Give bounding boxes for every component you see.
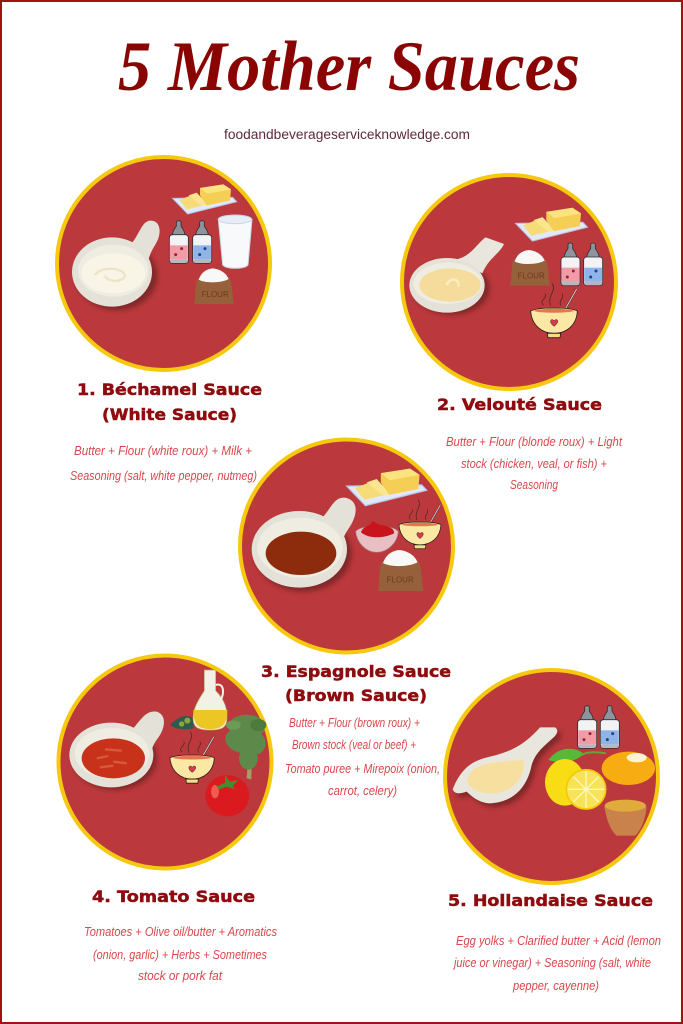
heading: béchamel sauce: 1. Béchamel Sauce [77, 380, 262, 399]
recipe text: espagnole: Tomato puree + Mirepoix (onion, [285, 761, 440, 776]
circle badge 5 [445, 670, 658, 883]
title: 5 Mother Sauces [118, 28, 580, 106]
heading: white sauce: (White Sauce) [102, 405, 237, 424]
recipe text: tomato: Tomatoes + Olive oil/butter + Aromatics [84, 924, 277, 939]
panel: béchamel sauce [57, 157, 270, 483]
website subtitle: foodandbeverageserviceknowledge.com [224, 127, 470, 142]
recipe text: hollandaise: pepper, cayenne) [512, 978, 599, 993]
panel: espagnole sauce [240, 440, 453, 798]
recipe text: velouté: stock (chicken, veal, or fish) + [461, 456, 607, 471]
panel: hollandaise sauce [445, 670, 661, 993]
recipe text: velouté: Seasoning [510, 477, 559, 492]
ingredient illustration: béchamel [72, 184, 252, 310]
circle badge 4 [58, 656, 272, 868]
recipe text: tomato: stock or pork fat [138, 968, 223, 983]
recipe text: espagnole: Brown stock (veal or beef) + [292, 737, 416, 752]
recipe text: espagnole [285, 715, 440, 798]
panel: tomato sauce [58, 656, 277, 983]
recipe text: velouté [446, 434, 623, 492]
recipe text: hollandaise: juice or vinegar) + Seasoning (salt, white [452, 955, 651, 970]
panel: velouté sauce [402, 175, 623, 492]
ingredient illustration: hollandaise [453, 706, 655, 836]
recipe text: espagnole: Butter + Flour (brown roux) + [289, 715, 420, 730]
recipe text: hollandaise [452, 933, 661, 993]
recipe text: tomato: (onion, garlic) + Herbs + Sometimes [93, 947, 267, 962]
heading: brown sauce: (Brown Sauce) [285, 686, 427, 705]
circle badge 2 [402, 175, 616, 389]
recipe text: béchamel [70, 443, 257, 483]
ingredient illustration: béchamel: FLOUR [202, 290, 229, 299]
recipe text: béchamel: Butter + Flour (white roux) + Milk + [74, 443, 252, 458]
heading: hollandaise sauce: 5. Hollandaise Sauce [448, 891, 653, 910]
recipe text: béchamel: Seasoning (salt, white pepper, nutmeg) [70, 468, 257, 483]
heading: velouté sauce: 2. Velouté Sauce [437, 395, 602, 414]
circle badge 1 [57, 157, 270, 370]
ingredient illustration: espagnole: FLOUR [387, 575, 414, 584]
ingredient illustration: espagnole [252, 469, 441, 592]
heading: tomato sauce: 4. Tomato Sauce [92, 887, 255, 906]
recipe text: espagnole: carrot, celery) [328, 783, 397, 798]
recipe text: velouté: Butter + Flour (blonde roux) + Light [446, 434, 623, 449]
circle badge 3 [240, 440, 453, 652]
heading: espagnole sauce: 3. Espagnole Sauce [261, 662, 451, 681]
ingredient illustration: velouté [409, 208, 603, 338]
ingredient illustration: tomato [69, 670, 266, 816]
ingredient illustration: velouté: FLOUR [518, 271, 545, 280]
recipe text: tomato [84, 924, 277, 983]
